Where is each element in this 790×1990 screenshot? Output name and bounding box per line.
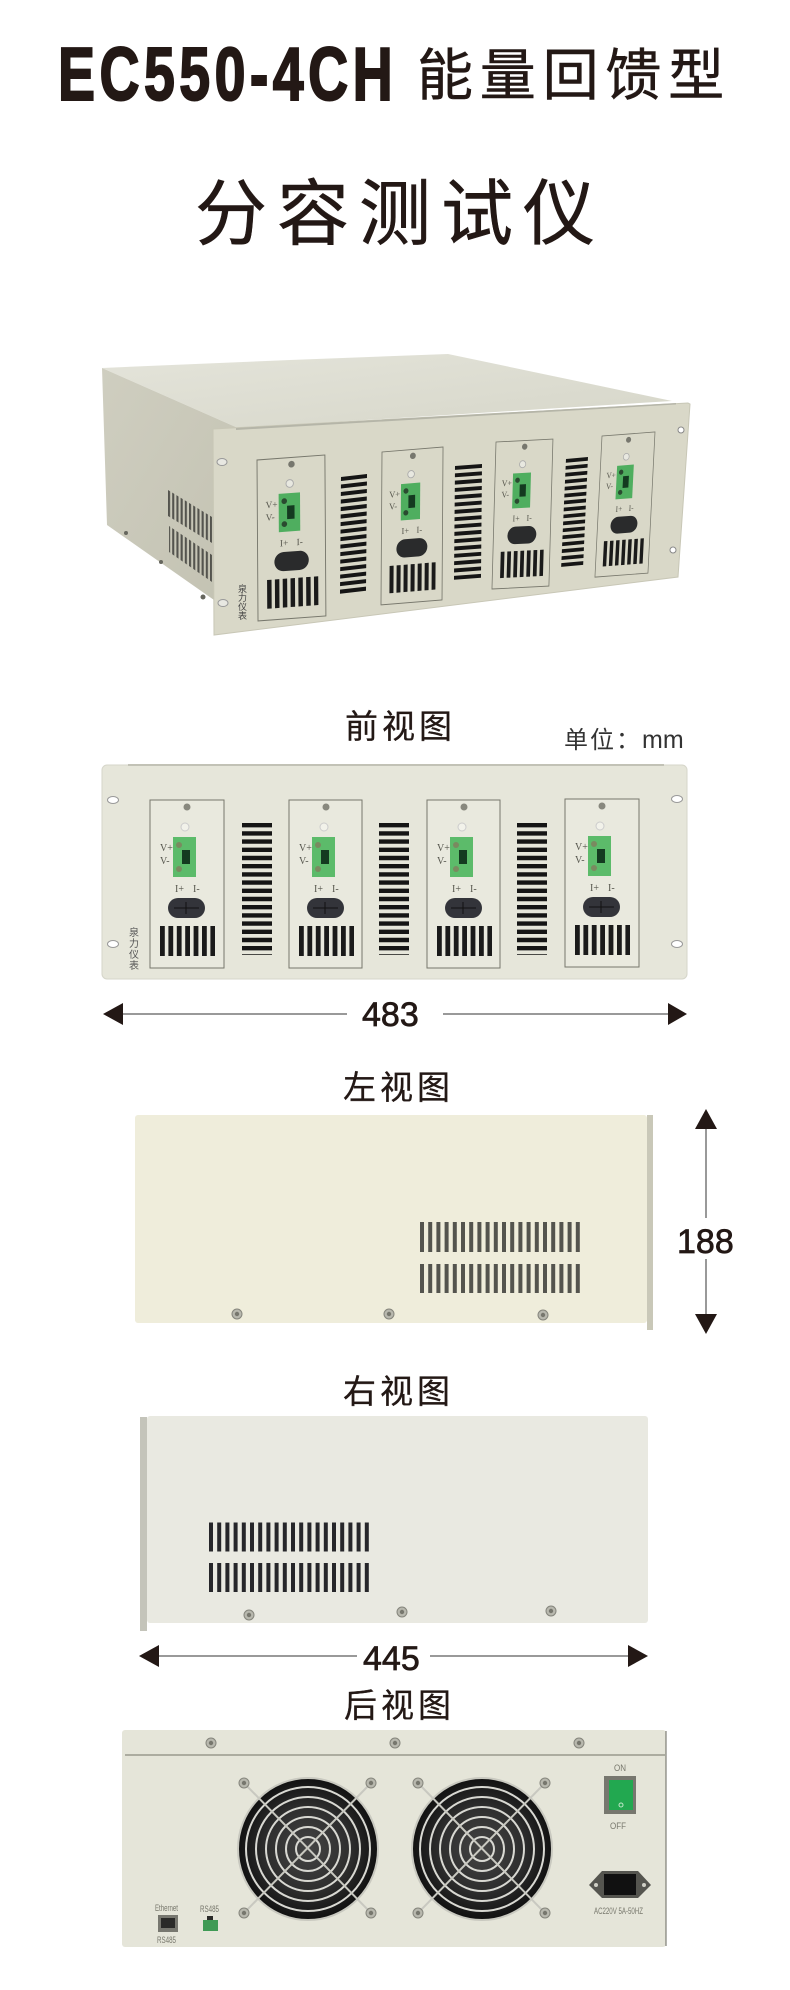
- dimension 483: [103, 996, 687, 1034]
- front module 2: V+: [299, 843, 312, 854]
- photo module 4: V-: [606, 481, 614, 491]
- heading: front view: 前视图: [345, 708, 456, 745]
- left view panel: [135, 1115, 653, 1330]
- ethernet port: Ethernet: [155, 1903, 178, 1913]
- front module 4: V-: [575, 855, 585, 866]
- photo module 3: [492, 439, 553, 589]
- dimension 445: 445: [363, 1640, 420, 1678]
- power switch: OFF: [610, 1821, 626, 1831]
- heading: rear view: 后视图: [344, 1687, 455, 1724]
- unit note: 单位：mm: [564, 726, 684, 754]
- front module 3: V+: [437, 843, 450, 854]
- brand mark on photo: 泉: [238, 583, 247, 594]
- power switch: ON: [614, 1763, 626, 1773]
- front module 1: V+: [160, 843, 173, 854]
- ethernet port: RS485: [157, 1935, 176, 1945]
- photo module 2: I-: [417, 524, 422, 535]
- front module 3: V-: [437, 856, 447, 867]
- photo module 4: I-: [629, 503, 634, 513]
- photo module 3: I+: [512, 514, 520, 524]
- front module 4: [565, 799, 639, 967]
- dimension 483: 483: [362, 996, 419, 1034]
- photo module 3: V+: [502, 478, 512, 488]
- heading: left view: 左视图: [343, 1069, 454, 1106]
- front module 4: I+: [590, 883, 599, 894]
- side screws: [232, 1309, 548, 1320]
- front module 1: I-: [193, 884, 200, 895]
- front vents: [257, 823, 532, 955]
- photo vent 1: [353, 476, 354, 595]
- front module 3: I-: [470, 884, 477, 895]
- chassis top surface: [102, 354, 672, 428]
- RS485 connector: RS485: [200, 1904, 219, 1914]
- power switch: [604, 1763, 636, 1831]
- photo module 3: I-: [526, 513, 532, 523]
- front module 4: V+: [575, 842, 588, 853]
- title: model and type: 能量回馈型: [417, 44, 731, 107]
- side screws: [244, 1606, 556, 1620]
- subtitle: 分容测试仪: [195, 175, 605, 255]
- photo module 2: V+: [389, 489, 400, 500]
- front module 3: [427, 800, 500, 968]
- brand mark on photo: 仪: [238, 602, 247, 612]
- dimension 188: 188: [677, 1223, 734, 1261]
- photo module 2: I+: [401, 525, 409, 536]
- fan 2: [412, 1778, 552, 1920]
- front view panel: [102, 764, 687, 979]
- photo vent 3: [572, 458, 577, 569]
- photo module 1: V-: [266, 513, 275, 524]
- front module 4: I-: [608, 883, 615, 894]
- title: model and type: [58, 32, 731, 116]
- photo vent 2: [467, 465, 468, 582]
- power inlet: AC220V 5A-50HZ: [594, 1906, 643, 1916]
- power inlet: [589, 1871, 651, 1916]
- photo module 4: V+: [606, 470, 617, 480]
- front module 3: I+: [452, 884, 461, 895]
- brand mark: 力: [129, 937, 139, 950]
- rear view panel: [122, 1730, 666, 1947]
- title: model and type: EC550-4CH: [58, 32, 397, 116]
- photo module 4: [595, 432, 655, 577]
- brand mark: 泉: [129, 926, 139, 939]
- brand mark: 仪: [129, 949, 139, 961]
- front module 2: I-: [332, 884, 339, 895]
- dimension 188: [677, 1109, 734, 1334]
- front module 2: [289, 800, 362, 968]
- photo module 3: V-: [501, 490, 509, 500]
- side vents: [420, 1237, 584, 1278]
- photo module 2: [381, 447, 443, 605]
- brand mark: [129, 926, 139, 972]
- photo module 1: V+: [266, 500, 278, 511]
- front module 2: I+: [314, 884, 323, 895]
- side vents: [209, 1537, 371, 1578]
- photo module 1: [257, 455, 326, 621]
- right view panel: [140, 1416, 648, 1631]
- photo module 4: I+: [615, 504, 623, 514]
- brand mark on photo: 表: [238, 610, 247, 621]
- front module 1: V-: [160, 856, 170, 867]
- dimension 445: [139, 1640, 648, 1678]
- chassis side surface: [102, 368, 238, 600]
- heading: right view: 右视图: [343, 1373, 454, 1410]
- RS485 connector: [200, 1904, 219, 1931]
- product photo: [102, 354, 690, 635]
- photo module 1: I-: [297, 538, 303, 548]
- ethernet port: [155, 1903, 178, 1945]
- front module 1: I+: [175, 884, 184, 895]
- photo module 1: I+: [280, 539, 288, 550]
- fan 1: [238, 1778, 378, 1920]
- brand mark on photo: [238, 583, 247, 621]
- top screws: [206, 1738, 584, 1748]
- front panel: [213, 403, 690, 635]
- brand mark: 表: [129, 959, 139, 972]
- photo module 2: V-: [389, 501, 397, 512]
- front module 2: V-: [299, 856, 309, 867]
- brand mark on photo: 力: [238, 592, 247, 603]
- front module 1: [150, 800, 224, 968]
